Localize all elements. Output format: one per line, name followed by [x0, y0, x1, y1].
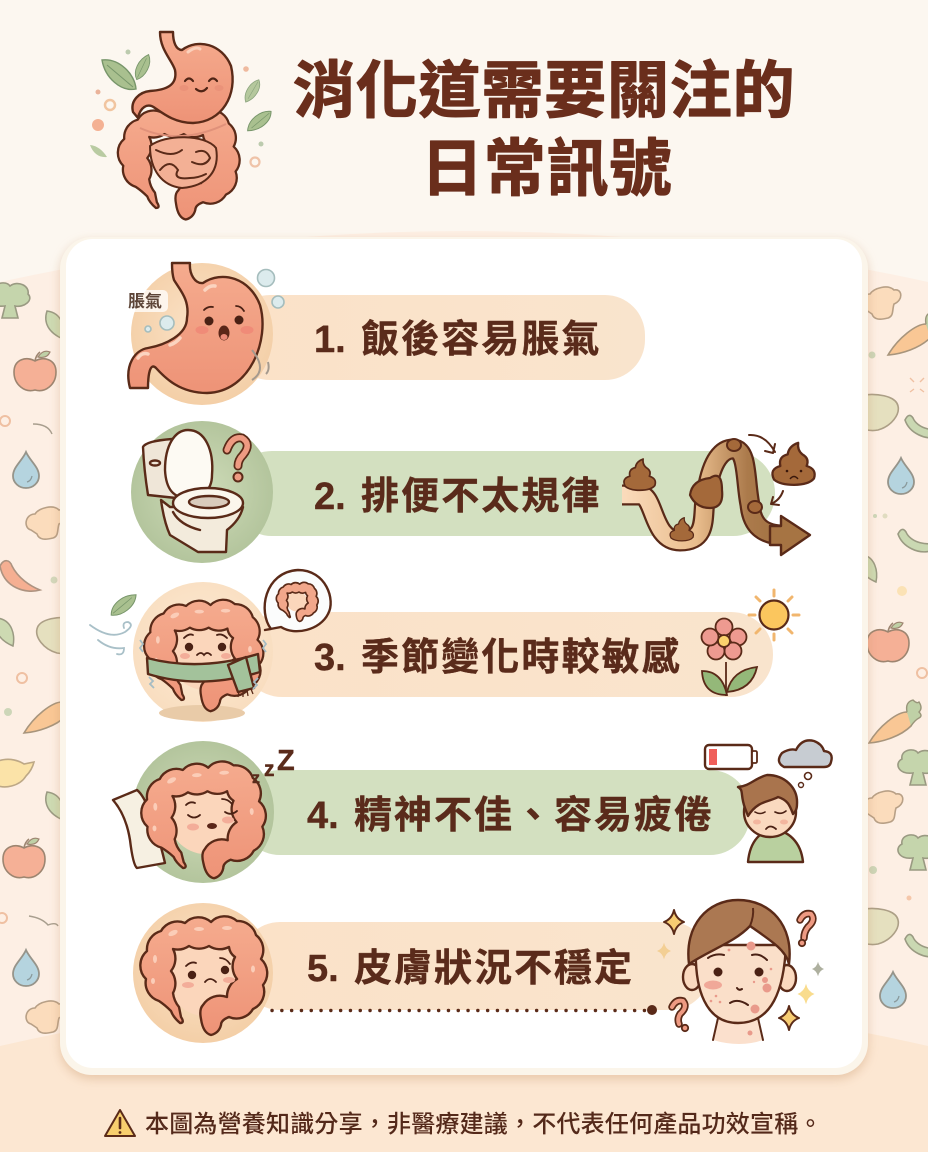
icon: transit tube and arrow — [622, 435, 815, 555]
title: 日常訊號 — [421, 118, 672, 208]
label text: 4. — [307, 795, 339, 837]
label text: 3. — [314, 637, 346, 679]
label text: 飯後容易脹氣 — [361, 319, 602, 361]
label text: 排便不太規律 — [361, 476, 602, 518]
bubbles — [145, 270, 284, 332]
icon: cloud — [779, 740, 832, 788]
footer disclaimer — [105, 1110, 823, 1138]
dotted line end — [647, 1005, 657, 1015]
icon: zzz: Z — [277, 745, 295, 777]
label text: 季節變化時較敏感 — [361, 637, 682, 679]
icon: pillow — [113, 790, 165, 868]
icon: question mark — [227, 438, 247, 482]
pill — [230, 451, 775, 536]
row 4: fatigue — [113, 740, 832, 883]
dotted line — [272, 1009, 648, 1012]
icon: header stomach and intestines — [90, 32, 271, 220]
row 1: bloating — [126, 263, 645, 405]
icon circle — [131, 263, 273, 405]
row 5: skin — [133, 900, 824, 1044]
icon: warning triangle — [105, 1110, 135, 1136]
icon: colon with scarf — [140, 600, 266, 711]
pill — [240, 922, 710, 1010]
pill — [240, 612, 773, 697]
icon circle — [133, 582, 273, 722]
icon: zzz: z — [264, 758, 274, 781]
disclaimer text: 本圖為營養知識分享，非醫療建議，不代表任何產品功效宣稱。 — [145, 1111, 823, 1138]
label text: 皮膚狀況不穩定 — [354, 948, 634, 990]
label: bloating — [126, 290, 168, 312]
icon circle — [131, 421, 273, 563]
icon: woman with skin issues — [683, 900, 796, 1044]
label text: 1. — [314, 319, 346, 361]
icon: worried colon — [140, 916, 267, 1035]
leaves and dots — [90, 50, 271, 166]
pill — [230, 295, 645, 380]
icon: tired boy — [738, 775, 803, 862]
speech bubble — [265, 570, 331, 631]
label text: 5. — [307, 948, 339, 990]
row 2: irregular bowel — [131, 421, 815, 563]
pill — [240, 770, 750, 855]
icon: flower — [702, 618, 757, 696]
icon: low battery — [705, 745, 757, 769]
icon: sun — [749, 590, 799, 640]
icon: sparkles and question marks — [657, 910, 824, 1031]
icon: leaf and wind — [90, 591, 136, 654]
row 3: seasonal sensitivity — [90, 570, 799, 722]
icon: sleepy colon — [139, 759, 269, 882]
title: 消化道需要關注的 — [293, 40, 795, 130]
label text: 精神不佳、容易疲倦 — [354, 795, 714, 837]
icon: toilet — [143, 430, 243, 552]
icon circle — [132, 741, 274, 883]
icon circle — [133, 903, 273, 1043]
icon: zzz: z — [252, 770, 260, 787]
icon: stomach — [128, 263, 269, 393]
label: bloating: 脹氣 — [128, 292, 162, 311]
label text: 2. — [314, 476, 346, 518]
panel: white card — [60, 237, 868, 1075]
